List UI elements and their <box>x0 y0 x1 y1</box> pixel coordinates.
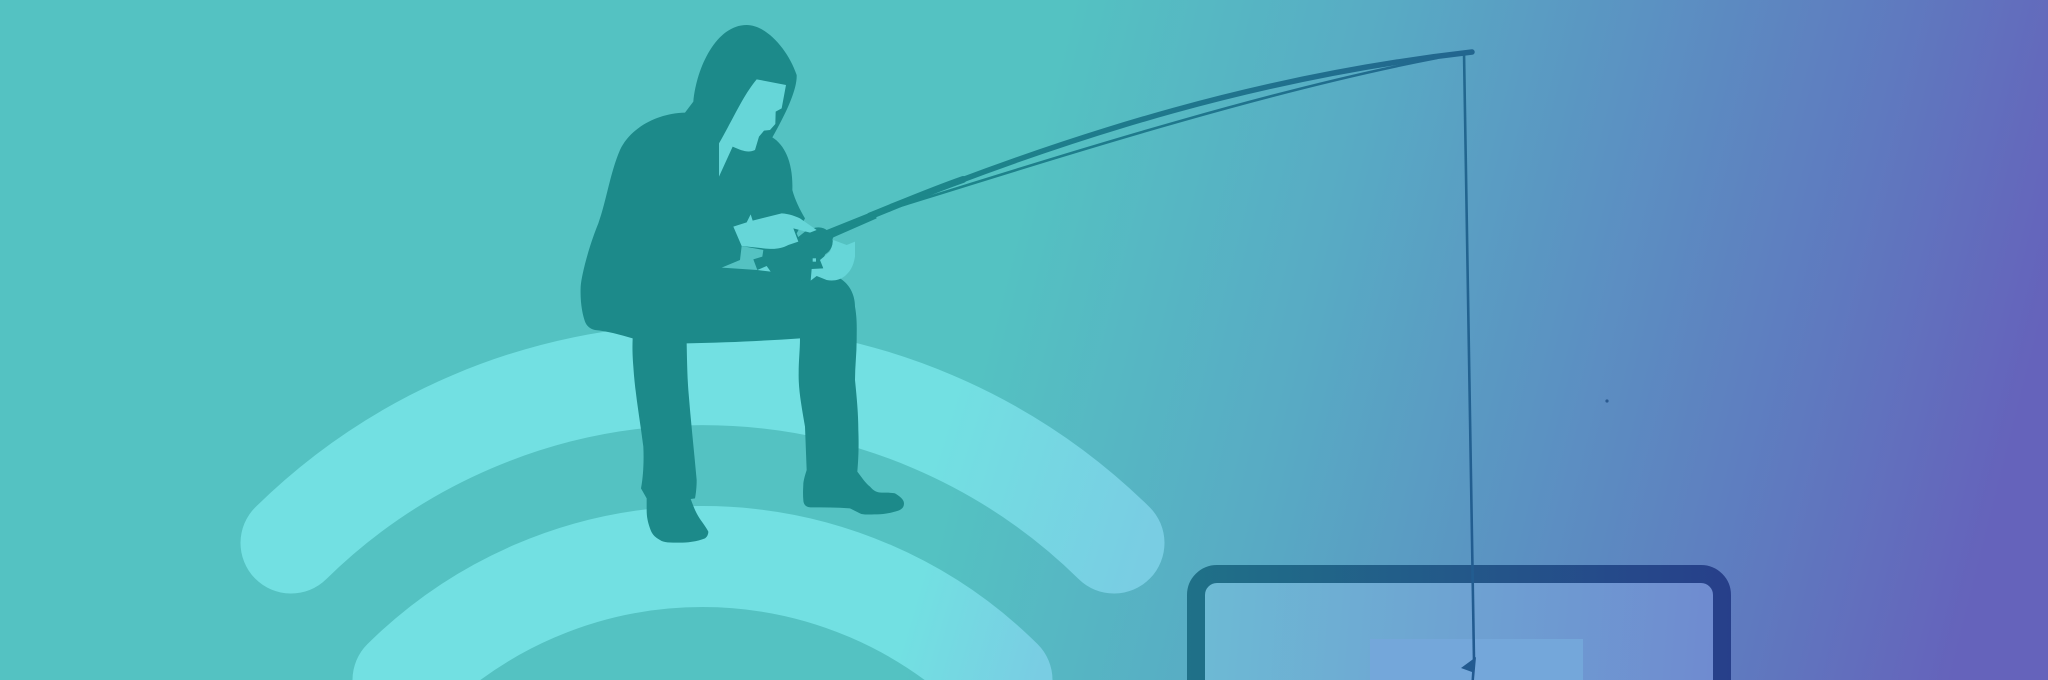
reel gap <box>813 258 816 262</box>
rod butt taper <box>870 180 963 216</box>
wifi symbol arcs <box>291 375 1114 680</box>
face <box>719 79 786 177</box>
rod grip <box>753 211 877 282</box>
device screen <box>1196 574 1722 680</box>
cuff highlight <box>757 266 771 272</box>
speck <box>1605 399 1609 403</box>
fishing line <box>1464 52 1474 660</box>
envelope panel <box>1370 639 1583 680</box>
body silhouette <box>581 25 904 543</box>
screen frame with envelope bait <box>1196 574 1722 680</box>
fisherman figure <box>581 25 904 543</box>
near hand <box>733 213 817 249</box>
rod lower strand <box>900 58 1437 206</box>
outer wifi arc <box>291 375 1114 543</box>
fishing rod <box>870 52 1472 216</box>
middle wifi arc <box>403 557 1002 680</box>
far hand <box>811 240 855 281</box>
sleeve shade <box>722 246 763 270</box>
rod main shaft <box>870 52 1472 216</box>
hook <box>1461 657 1476 680</box>
reel hub <box>804 227 833 256</box>
